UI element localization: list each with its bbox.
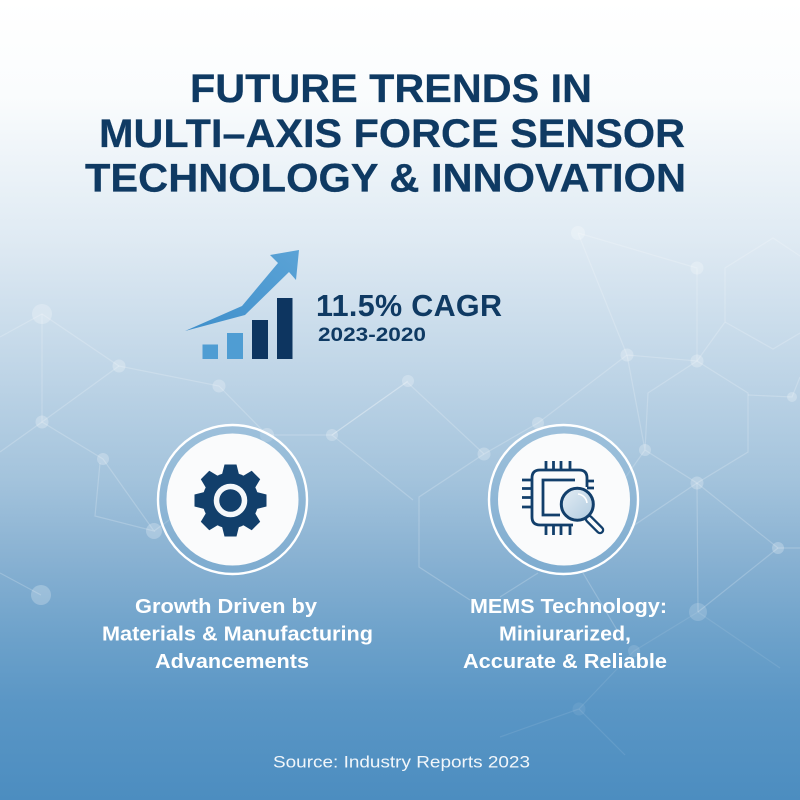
title: MULTI–AXIS FORCE SENSOR [99,112,685,156]
caption: growth drivers: Materials & Manufacturing [102,622,373,646]
CAGR stat [316,289,502,346]
title [85,67,686,200]
icon: MEMS chip badge [489,425,638,574]
caption: MEMS technology: Miniurarized, [499,622,631,646]
title: TECHNOLOGY & INNOVATION [85,156,686,200]
network pattern background [0,226,800,755]
CAGR stat: 2023-2020 [318,325,426,346]
bars [202,298,292,359]
caption: MEMS technology: Accurate & Reliable [463,650,667,673]
growth arrow [185,250,299,331]
title: FUTURE TRENDS IN [190,67,592,111]
chip glyph [522,461,594,535]
gear glyph [194,464,266,536]
caption: growth drivers: Growth Driven by [135,595,318,618]
icon: growth bar chart with arrow [185,250,299,359]
caption: MEMS technology: MEMS Technology: [470,595,667,618]
magnifier [561,488,600,530]
CAGR stat: 11.5% CAGR [316,289,502,323]
caption: growth drivers: Advancements [155,650,309,673]
caption: growth drivers [102,595,373,673]
icon: gear badge [158,425,307,574]
caption: MEMS technology [463,595,667,673]
source note: Source: Industry Reports 2023 [273,754,530,772]
